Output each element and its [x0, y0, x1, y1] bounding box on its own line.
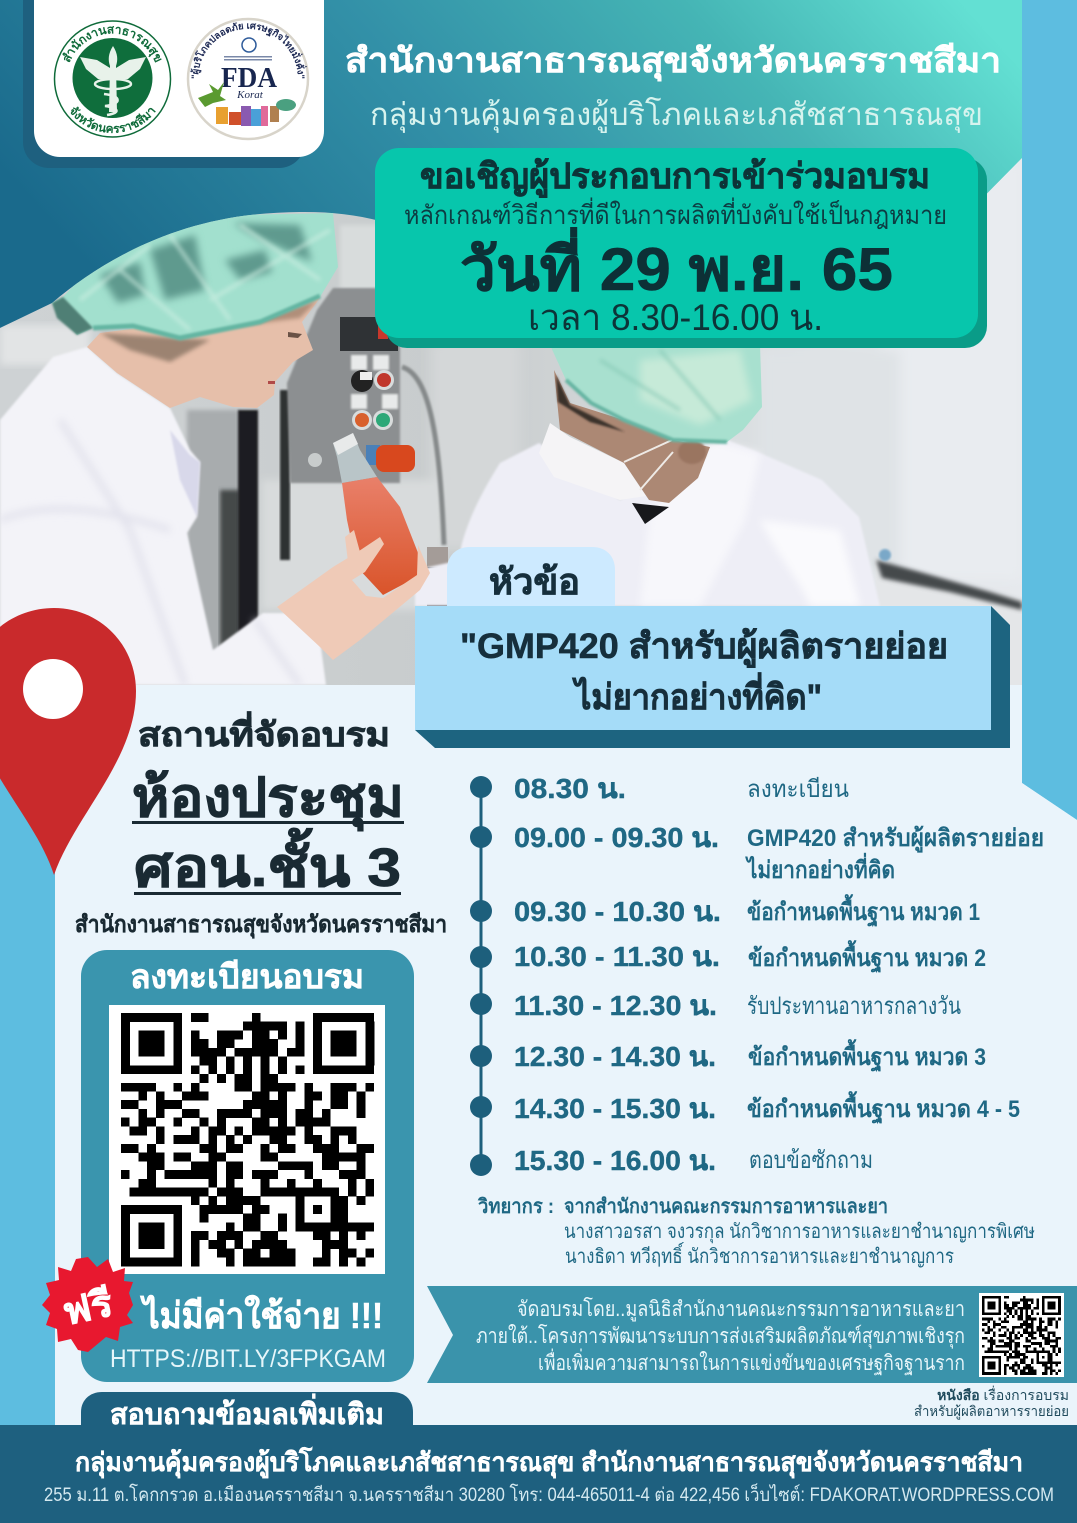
bottle: [333, 433, 422, 595]
man: face and ear: [554, 370, 710, 503]
logo: FDA Korat: FDA: [221, 62, 277, 94]
registration panel: [81, 950, 414, 1382]
schedule timeline: ตอบข้อซักถาม: [749, 1147, 873, 1174]
venue block: สถานที่จัดอบรม: [138, 711, 390, 753]
logo: provincial health office: [54, 20, 172, 138]
registration panel: ลงทะเบียนอบรม: [130, 958, 364, 995]
enquiry tab: สอบถามข้อมูลเพิ่มเติม: [110, 1393, 384, 1432]
woman: neck and face: [87, 298, 320, 408]
schedule timeline: ลงทะเบียน: [747, 776, 849, 803]
man: hair net: [550, 345, 762, 442]
organiser ribbon: [427, 1286, 1077, 1383]
schedule timeline: 14.30 - 15.30 น.: [514, 1093, 716, 1124]
schedule timeline: 09.30 - 10.30 น.: [514, 896, 721, 927]
topic box: "GMP420 สำหรับผู้ผลิตรายย่อย: [460, 627, 948, 668]
man: mask: [539, 423, 673, 500]
schedule timeline: ข้อกำหนดพื้นฐาน หมวด 1: [747, 893, 980, 928]
schedule timeline: ข้อกำหนดพื้นฐาน หมวด 2: [748, 939, 986, 974]
free badge: [42, 1257, 133, 1352]
organiser ribbon: ภายใต้..โครงการพัฒนาระบบการส่งเสริมผลิตภัณฑ์สุขภาพเชิงรุก: [476, 1324, 965, 1349]
speakers: [477, 1196, 1035, 1268]
speakers: นางธิดา ทวีฤทธิ์ นักวิชาการอาหารและยาชำนาญการ: [565, 1241, 954, 1268]
right blue stripe: [1022, 0, 1077, 820]
footer: [0, 1425, 1077, 1523]
venue block: [75, 711, 447, 939]
icon: location pin: [0, 608, 136, 875]
man: coat: [415, 440, 880, 606]
conveyor at right: [874, 548, 1022, 614]
schedule timeline: ข้อกำหนดพื้นฐาน หมวด 4 - 5: [747, 1090, 1020, 1125]
schedule timeline: 12.30 - 14.30 น.: [514, 1041, 716, 1072]
book caption: สำหรับผู้ผลิตอาหารรายย่อย: [914, 1403, 1069, 1420]
logo: FDA Korat: [186, 18, 310, 140]
footer: กลุ่มงานคุ้มครองผู้บริโภคและเภสัชสาธารณสุข สำนักงานสาธารณสุขจังหวัดนครราชสีมา: [75, 1446, 1023, 1479]
topic box: ไม่ยากอย่างที่คิด": [571, 672, 822, 717]
QR code: book: [979, 1293, 1064, 1377]
logo: FDA Korat: Korat: [236, 89, 264, 101]
dark post by bottle: [427, 547, 448, 607]
topic tab: [447, 547, 615, 606]
organisation title: สำนักงานสาธารณสุขจังหวัดนครราชสีมา: [345, 42, 1001, 82]
schedule timeline: ข้อกำหนดพื้นฐาน หมวด 3: [748, 1038, 986, 1073]
header gradient background: [0, 0, 1022, 340]
invitation heading: ขอเชิญผู้ประกอบการเข้าร่วมอบรม: [420, 157, 930, 198]
topic tab: หัวข้อ: [489, 561, 580, 602]
schedule timeline: 15.30 - 16.00 น.: [514, 1145, 716, 1176]
enquiry tab: [81, 1392, 413, 1432]
venue block: ศอน.ชั้น 3: [134, 828, 401, 898]
organisation subtitle: กลุ่มงานคุ้มครองผู้บริโภคและเภสัชสาธารณสุข: [370, 97, 983, 134]
registration panel: ไม่มีค่าใช้จ่าย !!!: [139, 1294, 383, 1336]
invitation subject: หลักเกณฑ์วิธีการที่ดีในการผลิตที่บังคับใช้เป็นกฎหมาย: [404, 197, 947, 230]
woman: coat: [0, 347, 326, 685]
book caption: หนังสือ เรื่องการอบรม: [937, 1386, 1069, 1403]
book caption: [914, 1386, 1069, 1420]
schedule timeline: 09.00 - 09.30 น.: [514, 822, 719, 853]
schedule timeline: 10.30 - 11.30 น.: [514, 941, 720, 972]
light content panel: [55, 685, 1077, 1425]
machine control panel: [287, 288, 444, 545]
event time: เวลา 8.30-16.00 น.: [528, 297, 823, 338]
event date: วันที่ 29 พ.ย. 65: [460, 227, 893, 303]
woman: hand: [277, 530, 430, 660]
QR code: registration: [109, 1005, 385, 1274]
logo: provincial health office: สำนักงานสาธารณสุข: [62, 26, 162, 63]
schedule timeline: GMP420 สำหรับผู้ผลิตรายย่อย: [747, 825, 1044, 853]
schedule timeline: รับประทานอาหารกลางวัน: [747, 993, 961, 1020]
venue block: สำนักงานสาธารณสุขจังหวัดนครราชสีมา: [75, 911, 447, 939]
organiser ribbon: เพื่อเพิ่มความสามารถในการแข่งขันของเศรษฐกิจฐานราก: [538, 1348, 965, 1375]
speakers: จากสำนักงานคณะกรรมการอาหารและยา: [564, 1196, 888, 1218]
registration panel: HTTPS://BIT.LY/3FPKGAM: [110, 1345, 386, 1373]
left blue stripe: [0, 680, 55, 1430]
woman: hair net: [52, 213, 338, 338]
logo: provincial health office: จังหวัดนครราชสีมา: [70, 106, 156, 134]
topic box: [415, 606, 1010, 748]
schedule timeline: 08.30 น.: [514, 773, 626, 804]
logo: FDA Korat: "ผู้บริโภคปลอดภัย เศรษฐกิจไทยมั่งคั่ง": [190, 22, 307, 78]
invitation panel: [375, 148, 987, 348]
schedule timeline: 11.30 - 12.30 น.: [514, 990, 717, 1021]
logo card: [23, 0, 324, 168]
schedule timeline: [470, 773, 1044, 1176]
free badge: ฟรี: [59, 1282, 116, 1333]
schedule timeline: ไม่ยากอย่างที่คิด: [744, 852, 895, 884]
organiser ribbon: จัดอบรมโดย..มูลนิธิสำนักงานคณะกรรมการอาหารและยา: [517, 1297, 965, 1322]
photo: workers inspecting bottle: [0, 150, 1022, 690]
speakers: วิทยากร :: [477, 1196, 554, 1218]
venue block: ห้องประชุม: [132, 768, 404, 832]
